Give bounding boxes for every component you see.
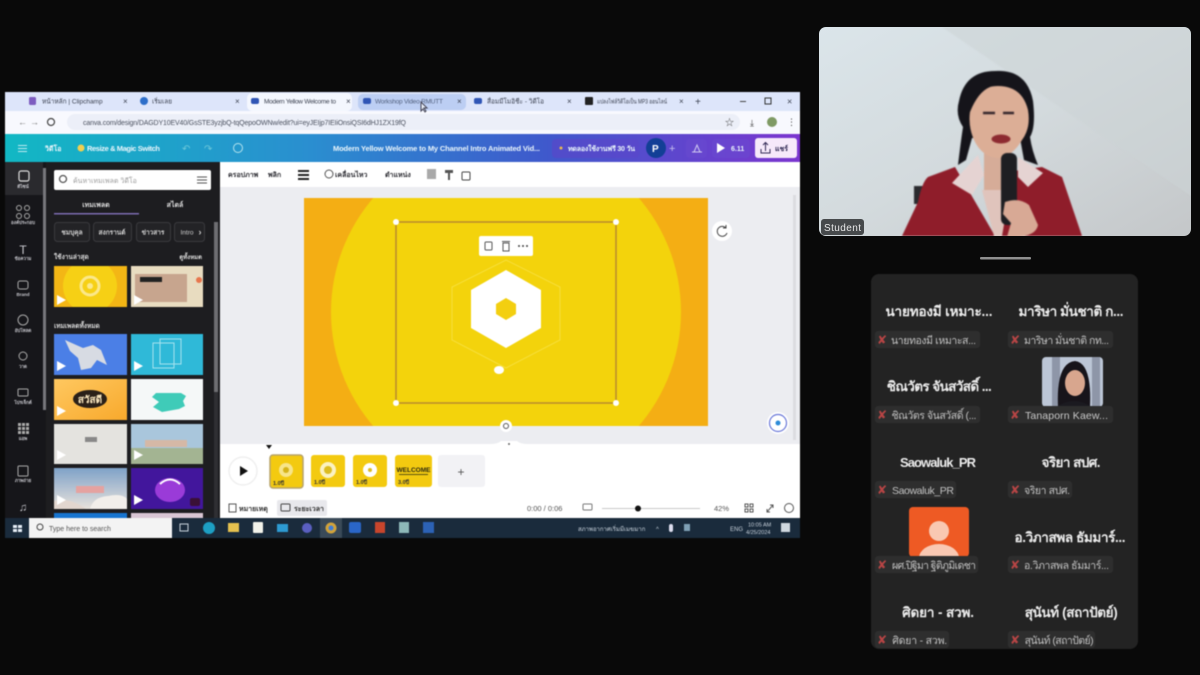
Canva header bar: วิดีโอ <box>44 144 61 153</box>
zoom slider <box>583 504 729 513</box>
participant: มาริษา: มาริษา มั่นชาติ ก... <box>1018 301 1124 319</box>
Canva left icon rail: วาด <box>19 364 27 369</box>
Canva left icon rail: แอพ <box>19 436 27 441</box>
start button <box>13 525 22 532</box>
timeline clip 4 <box>395 455 432 487</box>
participant: มาริษา <box>1008 301 1124 348</box>
browser tab bar: × <box>457 97 462 106</box>
Canva left icon rail: อัปโหลด <box>15 327 31 333</box>
participant: นายทองมี <box>875 304 992 348</box>
Canva header bar: ทดลองใช้งานฟรี 30 วัน <box>568 144 635 153</box>
Canva header bar: Resize & Magic Switch <box>87 144 160 153</box>
participant: Saowaluk_PR <box>875 455 977 498</box>
timeline clip 2: 1.0ปี <box>314 478 326 486</box>
address bar: → <box>30 117 39 127</box>
participant: มาริษา: มาริษา มั่นชาติ กท... <box>1024 333 1109 347</box>
Canva element toolbar: ครอปภาพ <box>228 171 259 179</box>
template search box: ค้นหาเทมเพลต วิดีโอ <box>73 176 137 185</box>
browser tab bar: × <box>235 97 240 106</box>
participant: ศิดยา <box>875 605 974 648</box>
refresh button <box>712 221 732 241</box>
participant: สุนันท์ <box>1008 604 1118 648</box>
Canva left icon rail: ดีไซน์ <box>17 183 30 189</box>
Canva left icon rail <box>5 162 47 518</box>
add clip button: + <box>457 465 465 479</box>
participant: ศิดยา: ✘ <box>877 633 887 647</box>
Canva header bar: P <box>652 144 659 155</box>
Canva element toolbar: เคลื่อนไหว <box>335 169 367 179</box>
address bar: ⋮ <box>787 117 796 127</box>
participant: ชิณวัตร: ชิณวัตร จันสวัสดิ์ (... <box>891 407 976 422</box>
participant: อ.วิภาสพล: ✘ <box>1010 558 1020 572</box>
Canva left icon rail: T <box>19 243 27 257</box>
participant: สุนันท์: สุนันท์ (สถาปัตย์) <box>1025 604 1118 621</box>
chair <box>914 186 924 204</box>
thumbnail: collage <box>131 266 203 307</box>
browser tab bar: หน้าหลัก | Clipchamp <box>42 98 103 106</box>
duration button <box>277 500 327 516</box>
participant: Tanaporn: Tanaporn Kaew... <box>1025 410 1108 422</box>
browser tab bar: × <box>123 97 128 106</box>
browser tab bar: แปลงไฟล์วิดีโอเป็น MP3 ออนไลน์ <box>597 96 667 106</box>
hair <box>958 71 1038 165</box>
system tray: ENG <box>730 527 743 533</box>
microphone <box>1001 153 1017 225</box>
play button <box>229 457 257 485</box>
system tray: 10:05 AM <box>748 522 772 528</box>
system tray <box>578 522 790 536</box>
Canva left icon rail: ข้อความ <box>15 255 31 261</box>
browser tab bar: × <box>567 97 572 106</box>
participant: มาริษา: ✘ <box>1010 333 1020 347</box>
participant: Tanaporn: ✘ <box>1010 408 1020 422</box>
floating element toolbar <box>479 236 533 256</box>
Canva header bar: ↶ <box>182 144 190 155</box>
timeline clip 1: 1.0ปี <box>273 479 285 487</box>
participant: จริยา <box>1008 455 1100 498</box>
filter chips <box>54 222 204 242</box>
participant: อ.วิภาสพล: อ.วิภาสพล ธัมมาร์... <box>1024 559 1109 572</box>
browser tab bar: เริ่มเลย <box>152 96 172 106</box>
Canva header bar: Modern Yellow Welcome to My Channel Intro Animated Vid... <box>333 144 540 153</box>
browser tab bar: × <box>346 97 351 106</box>
participant: ชิณวัตร <box>875 376 992 423</box>
magic assistant button <box>767 412 789 434</box>
filter chips: Intro <box>180 230 194 236</box>
participant: Tanaporn <box>1008 357 1113 423</box>
participant: จริยา: จริยา สปศ. <box>1024 485 1070 497</box>
thumbnail: teal frames <box>131 334 203 375</box>
Canva left icon rail: ภาพถ่าย <box>15 478 32 483</box>
browser tab bar: × <box>787 96 792 106</box>
red jacket <box>902 167 1082 236</box>
participant: ศิดยา: ศิดยา - สวพ. <box>892 635 947 647</box>
participant: Saowaluk_PR: Saowaluk_PR <box>892 485 954 497</box>
browser tab bar: สื่อมมีโมอิชีะ - วิดีโอ <box>487 96 544 106</box>
Canva element toolbar <box>220 162 800 187</box>
Canva header bar: 6.11 <box>731 146 744 153</box>
timeline clip 1 <box>270 455 303 488</box>
system tray: ^ <box>656 527 659 533</box>
Canva left icon rail: องค์ประกอบ <box>11 219 35 225</box>
hand <box>1003 200 1038 237</box>
outlined hexagon <box>452 260 560 368</box>
participant: อ.วิภาสพล <box>1008 529 1126 573</box>
participant: นายทองมี: นายทองมี เหมาะ... <box>886 304 992 319</box>
shared screen: browser window <box>5 92 800 538</box>
participant: อ.วิภาสพล: อ.วิภาสพล ธัมมาร์... <box>1014 529 1126 545</box>
playback time: 0:00 / 0:06 <box>527 504 562 513</box>
section heading: all templates: เทมเพลตทั้งหมด <box>54 320 100 330</box>
selection frame <box>393 219 619 406</box>
participant: จริยา: ✘ <box>1010 483 1020 497</box>
view controls <box>745 504 794 512</box>
face <box>970 86 1029 158</box>
participant: ชิณวัตร: ชิณวัตร จันสวัสดิ์ ... <box>887 376 992 394</box>
section heading: recently used <box>54 251 202 262</box>
video canvas <box>303 197 709 427</box>
zoom slider: 42% <box>714 504 729 513</box>
participant: Saowaluk_PR: ✘ <box>877 483 887 497</box>
duration button: ระยะเวลา <box>294 506 324 513</box>
notes button: หมายเหตุ <box>239 506 268 513</box>
participant: สุนันท์: สุนันท์ (สถาปัตย์) <box>1025 634 1094 647</box>
template search box <box>54 170 211 190</box>
participant: ชิณวัตร: ✘ <box>877 408 887 422</box>
Canva left icon rail: ♫ <box>19 502 27 514</box>
Canva left icon rail: โปรเจ็กต์ <box>13 398 32 405</box>
thumbnail: yellow circle <box>53 265 128 308</box>
system tray: 4/25/2024 <box>746 530 770 536</box>
Canva templates panel <box>46 162 220 519</box>
panel tabs: เทมเพลต <box>82 202 110 209</box>
system tray: สภาพอากาศเริ่มมีเมฆมาก <box>578 525 646 533</box>
orange avatar <box>908 506 970 557</box>
participant: ศิดยา: ศิดยา - สวพ. <box>902 605 974 620</box>
section heading: recently used: ใช้งานล่าสุด <box>54 252 89 261</box>
timeline clip 4: 3.0ปี <box>398 478 410 486</box>
Canva header bar: ↷ <box>204 144 213 155</box>
thumbnail: blue splash <box>54 334 127 375</box>
thumbnail: light grey <box>54 424 127 464</box>
timeline clip 3 <box>353 455 387 487</box>
video tile name tag: Student <box>824 223 861 234</box>
participant: นายทองมี: นายทองมี เหมาะส... <box>891 334 976 347</box>
browser tab bar <box>5 92 800 111</box>
address bar: ☆ <box>725 118 734 128</box>
browser tab bar: Modern Yellow Welcome to <box>264 98 336 106</box>
participant: Saowaluk_PR: Saowaluk_PR <box>900 455 977 470</box>
filter chips: สงกรานต์ <box>99 228 125 236</box>
presenter video tile <box>819 27 1191 237</box>
rotate handle <box>500 420 512 432</box>
participant: นายทองมี: ✘ <box>877 333 887 347</box>
address bar: ← <box>18 117 27 127</box>
participant: ผศ.ปิฐิมา: ผศ.ปิฐิมา ฐิติภูมิเดชา <box>892 560 976 572</box>
canvas workspace <box>220 187 800 444</box>
thumbnail: white with teal blob <box>131 379 203 420</box>
notes button <box>229 504 268 513</box>
thumbnail: orange greeting: สวัสดี <box>78 394 102 406</box>
thumbnail: sky and leaves <box>131 424 203 464</box>
Canva header bar: + <box>669 143 675 155</box>
neck <box>983 152 1002 191</box>
timeline strip <box>220 441 800 518</box>
timeline clip 4: WELCOME <box>397 467 431 474</box>
filter chips: › <box>198 227 202 237</box>
section heading: recently used: ดูทั้งหมด <box>179 251 202 262</box>
participant: จริยา: จริยา สปศ. <box>1042 455 1100 470</box>
taskbar search box <box>29 518 172 538</box>
moving dot <box>494 366 504 374</box>
address bar: canva.com/design/DAGDY10EV40/GsSTE3yzjbQ-tqQepoOWNw/edit?ui=eyJEIjp7IEIiOnsiQSI6dHJ1ZX19fQ <box>83 120 407 127</box>
filter chips: ข่าวสาร <box>142 228 165 236</box>
participant: ผศ.ปิฐิมา: ✘ <box>877 558 887 572</box>
mouse cursor <box>421 102 427 112</box>
video tile name tag <box>821 219 864 235</box>
address bar <box>5 111 800 134</box>
filter chips: ชมบุคุล <box>61 230 83 236</box>
Canva header bar: แชร์ <box>775 144 788 153</box>
Canva header bar <box>5 134 800 162</box>
taskbar search box: Type here to search <box>49 526 111 533</box>
panel tabs <box>54 200 183 214</box>
panel drag handle <box>980 257 1031 260</box>
timeline clip 2 <box>311 455 345 487</box>
browser tab bar: × <box>679 97 684 106</box>
participant: สุนันท์: ✘ <box>1010 633 1020 647</box>
Canva element toolbar: ตำแหน่ง <box>385 171 411 179</box>
browser tab bar: + <box>695 97 701 108</box>
panel collapse handle <box>220 322 225 361</box>
thumbnail: orange greeting <box>54 379 127 420</box>
Canva element toolbar: พลิก <box>268 171 281 179</box>
thumbnail: clouds <box>54 468 127 509</box>
add clip button <box>438 455 485 487</box>
Canva left icon rail: Brand <box>16 292 30 297</box>
Windows taskbar <box>5 518 800 538</box>
blouse collar <box>952 155 1043 195</box>
blouse <box>982 190 1005 236</box>
participant photo <box>1042 357 1103 407</box>
participant: ผศ.ปิฐิมา <box>875 507 978 573</box>
address bar: ⤓ <box>750 118 754 128</box>
browser tab bar: Workshop Video RMUTT <box>375 98 443 106</box>
thumbnail: purple space <box>131 468 203 509</box>
timeline clip 3: 1.0ปี <box>356 478 368 486</box>
taskbar app icons <box>180 518 434 538</box>
white hexagon <box>471 270 541 348</box>
participants panel <box>871 274 1138 649</box>
panel tabs: สไตล์ <box>167 200 183 209</box>
